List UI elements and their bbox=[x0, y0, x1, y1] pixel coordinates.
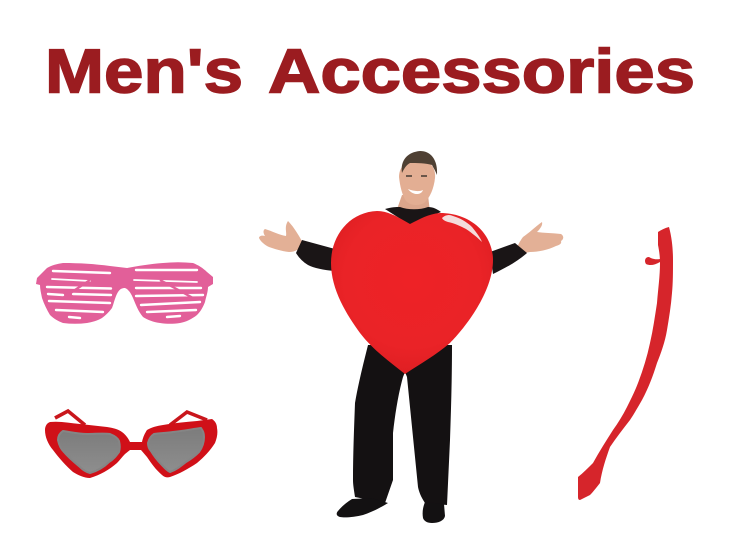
collar bbox=[385, 207, 441, 225]
heart costume bbox=[331, 211, 493, 374]
title: Men's bbox=[45, 38, 243, 107]
smile bbox=[408, 189, 423, 194]
left sleeve bbox=[296, 240, 335, 271]
right lens bbox=[148, 428, 204, 472]
left hand bbox=[259, 221, 303, 252]
crossing bars bbox=[63, 280, 193, 298]
right shoe bbox=[423, 502, 445, 523]
title bbox=[45, 38, 695, 107]
tail loop bbox=[645, 257, 660, 265]
temples bbox=[55, 411, 207, 425]
title: Accessories bbox=[268, 38, 695, 107]
pink shutter shades bbox=[36, 262, 213, 324]
head bbox=[399, 160, 435, 205]
slats bbox=[47, 270, 203, 318]
hair bbox=[402, 151, 437, 175]
red heart sunglasses bbox=[45, 411, 217, 478]
eyes bbox=[406, 175, 427, 177]
heart highlight bbox=[442, 215, 482, 242]
right sleeve bbox=[490, 243, 527, 274]
trousers bbox=[353, 345, 452, 505]
frame bbox=[45, 419, 217, 478]
neck bbox=[396, 195, 430, 212]
left shoe bbox=[337, 498, 388, 517]
right hand bbox=[516, 222, 563, 253]
left lens bbox=[58, 431, 120, 473]
devil tail bbox=[578, 227, 673, 500]
figure: man in heart costume bbox=[259, 151, 563, 523]
